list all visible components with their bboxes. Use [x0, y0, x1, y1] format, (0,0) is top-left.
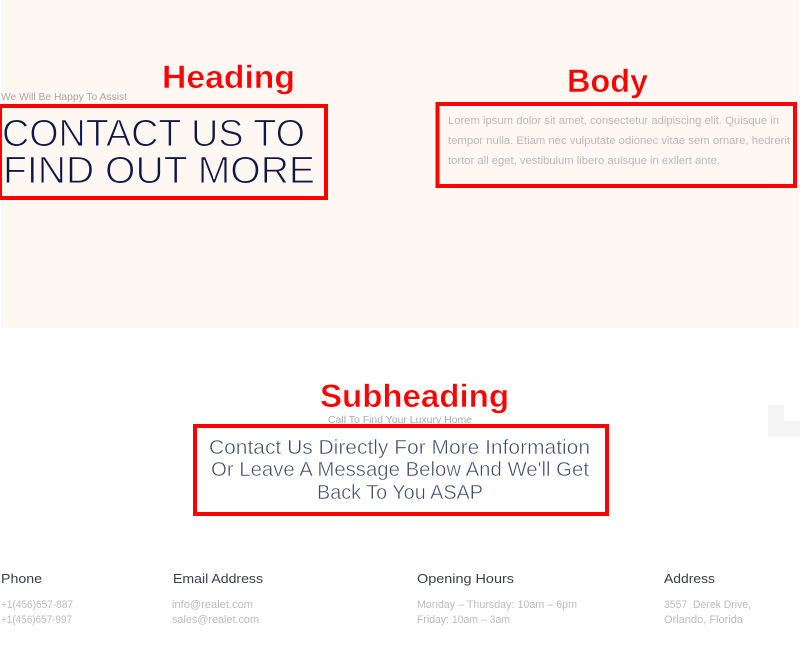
- label: Body: Body: [567, 63, 648, 99]
- subheading text block: Contact Us Directly For More Information: [209, 436, 590, 459]
- heading text block: CONTACT US TO: [2, 113, 305, 155]
- body text block: tortor all eget, vestibulum libero auisque in exllert ante.: [448, 155, 720, 167]
- contact column: phone: +1(456)657-997: [1, 614, 72, 626]
- subheading text block: Back To You ASAP: [317, 481, 483, 504]
- contact column: email address: [172, 571, 264, 626]
- contact column: opening hours: Friday: 10am – 3am: [417, 614, 510, 626]
- contact column: opening hours: Monday – Thursday: 10am – 6pm: [417, 599, 577, 611]
- label: Heading: Heading: [162, 59, 295, 95]
- heading text block: [2, 113, 315, 192]
- panel: hero background: [1, 0, 799, 328]
- contact column: address: [664, 571, 751, 626]
- contact column: phone: +1(456)657-887: [1, 599, 73, 611]
- body text block: tempor nulla. Etiam nec vulputate odionec vitae sem ornare, hedrerit: [448, 135, 790, 147]
- subheading text block: [209, 436, 590, 504]
- body text block: [448, 115, 790, 167]
- subheading text block: Or Leave A Message Below And We'll Get: [211, 458, 589, 481]
- body annotation box: [438, 104, 795, 186]
- subheading annotation box: [195, 426, 607, 514]
- contact column: address: 3557 Derek Drive,: [664, 599, 751, 611]
- contact column: email address: info@realet.com: [172, 599, 253, 611]
- contact column: email address: Email Address: [173, 571, 264, 586]
- label: Subheading: Subheading: [320, 378, 509, 414]
- heading text block: FIND OUT MORE: [3, 150, 315, 192]
- body text block: Lorem ipsum dolor sit amet, consectetur adipiscing elit. Quisque in: [448, 115, 779, 127]
- contact column: address: Orlando, Florida: [664, 614, 744, 626]
- contact column: opening hours: [417, 571, 577, 626]
- contact column: phone: [1, 571, 73, 626]
- contact column: address: Address: [664, 571, 716, 586]
- heading annotation box: [0, 106, 326, 198]
- contact column: email address: sales@realet.com: [172, 614, 259, 626]
- eyebrow: subheading section: Call To Find Your Luxury Home: [328, 415, 472, 426]
- eyebrow: heading section: We Will Be Happy To Assist: [1, 92, 127, 103]
- contact column: opening hours: Opening Hours: [417, 571, 515, 586]
- decorative grey corner block: [768, 405, 800, 437]
- contact column: phone: Phone: [1, 571, 42, 586]
